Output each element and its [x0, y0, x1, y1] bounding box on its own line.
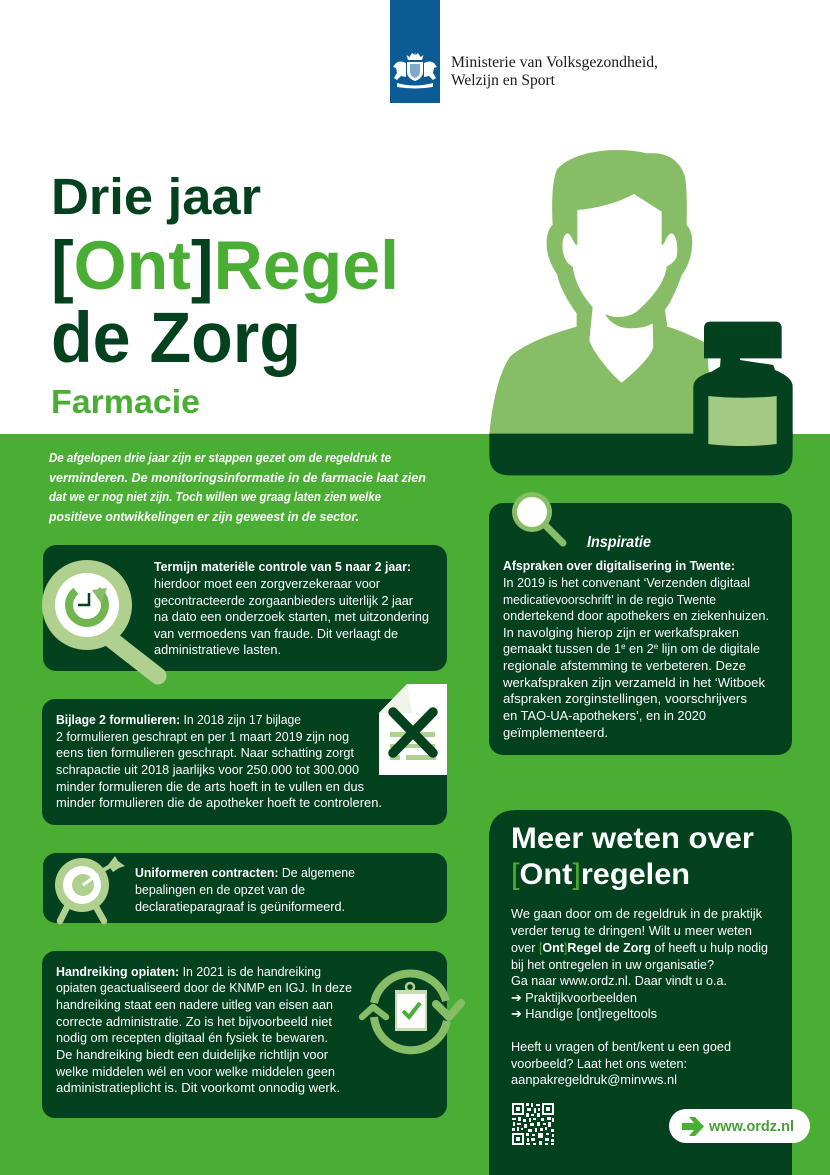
- panel: inspiratie: [489, 492, 792, 755]
- icon: small magnifier: [512, 492, 563, 543]
- text: meer weten: bij het ontregelen in uw organisatie?: [511, 957, 714, 972]
- title: [Ont]Regel: [51, 227, 399, 304]
- icon: arrow: [682, 1117, 704, 1136]
- text: handreiking: handreiking staat een nadere uitleg van eisen aan: [56, 997, 333, 1012]
- intro paragraph: verminderen. De monitoringsinformatie in de farmacie laat zien: [49, 470, 426, 485]
- logo ribbon with coat of arms: [390, 0, 440, 103]
- text: meer weten: over [Ont]Regel de Zorg of heeft u hulp nodig: [511, 940, 768, 955]
- ministry name: Welzijn en Sport: [451, 72, 556, 89]
- panel: handreiking opiaten: [42, 951, 461, 1118]
- text: bijlage: [56, 712, 382, 810]
- text: inspiratie: werkafspraken zijn verzameld in het ‘Witboek: [502, 675, 766, 690]
- text: inspiratie: e: [621, 642, 626, 651]
- heading: meer weten over ontregelen: [Ont]regelen: [511, 858, 690, 891]
- heading: meer weten over ontregelen: Meer weten over: [511, 822, 754, 855]
- icon: crossed-out form: [379, 684, 447, 775]
- dark base band: [489, 434, 793, 475]
- heading: meer weten over ontregelen: [511, 822, 754, 891]
- text: meer weten: voorbeeld? Laat het ons weten:: [511, 1056, 687, 1071]
- text: termijn: hierdoor moet een zorgverzekeraar voor: [154, 576, 381, 591]
- text: inspiratie: geïmplementeerd.: [503, 725, 608, 740]
- panel: termijn materiele controle: [42, 545, 447, 676]
- text: meer weten: ➔ Handige [ont]regeltools: [511, 1006, 657, 1021]
- text: inspiratie: medicatievoorschrift’ in de regio Twente: [503, 592, 716, 607]
- text: inspiratie: In navolging hierop zijn er werkafspraken: [503, 625, 739, 640]
- text: meer weten: verder terug te dringen! Wilt u meer weten: [511, 923, 752, 938]
- text: bijlage: Bijlage 2 formulieren: In 2018 zijn 17 bijlage: [56, 712, 301, 727]
- text: meer weten: ➔ Praktijkvoorbeelden: [511, 990, 637, 1005]
- bottle label: [708, 396, 777, 446]
- panel: uniformeren contracten: [43, 853, 447, 923]
- text: handreiking: Handreiking opiaten: In 2021 is de handreiking: [56, 964, 321, 979]
- intro paragraph: De afgelopen drie jaar zijn er stappen gezet om de regeldruk te: [49, 450, 391, 465]
- text: handreiking: administratieplicht is. Dit voorkomt onnodig werk.: [56, 1080, 340, 1095]
- ministry name: [451, 54, 658, 89]
- header: ministry logo: [390, 0, 658, 103]
- text: termijn: na dato een onderzoek starten, met uitzondering: [154, 609, 429, 624]
- text: termijn: gecontracteerde zorgaanbieders uiterlijk 2 jaar: [154, 593, 414, 608]
- text: bijlage: 2 formulieren geschrapt en per 1 maart 2019 zijn nog: [56, 729, 349, 744]
- text: termijn: [154, 559, 429, 657]
- icon: magnifier with clock: [42, 560, 158, 676]
- QR code: [512, 1103, 554, 1145]
- text: bijlage: eens tien formulieren geschrapt. Naar schatting zorgt: [56, 745, 354, 760]
- text: inspiratie: en TAO-UA-apothekers’, en in 2020: [503, 708, 706, 723]
- text: inspiratie: afspraken zorginstellingen, voorschrijvers: [503, 691, 747, 706]
- icon: target with arrow: [55, 856, 125, 921]
- text: uniformeren: declaratieparagraaf is geüniformeerd.: [135, 899, 345, 914]
- text: handreiking: welke middelen wél en voor welke middelen geen: [55, 1064, 335, 1079]
- text: handreiking: nodig om recepten digitaal én fysiek te bewaren.: [56, 1030, 328, 1045]
- text: uniformeren: Uniformeren contracten: De algemene: [135, 865, 355, 880]
- text: handreiking: [55, 964, 352, 1095]
- text: inspiratie: ondertekend door apothekers en ziekenhuizen.: [503, 608, 769, 623]
- text: meer weten: We gaan door om de regeldruk in de praktijk: [511, 906, 763, 921]
- panel: bijlage 2 formulieren: [42, 684, 447, 825]
- text: meer weten: Heeft u vragen of bent/kent u een goed: [511, 1039, 731, 1054]
- text: termijn: Termijn materiële controle van 5 naar 2 jaar:: [154, 559, 411, 574]
- icon: pharmacist with medicine bottle: [489, 150, 793, 475]
- intro paragraph: positieve ontwikkelingen er zijn geweest in de sector.: [48, 509, 359, 524]
- text: bijlage: minder formulieren die de apotheker hoeft te controleren.: [56, 795, 382, 810]
- intro paragraph: dat we er nog niet zijn. Toch willen we graag laten zien welke: [49, 489, 381, 504]
- text: meer weten: [511, 906, 768, 1087]
- panel: meer weten: [489, 810, 810, 1175]
- text: meer weten: Ga naar www.ordz.nl. Daar vindt u o.a.: [511, 973, 727, 988]
- text: handreiking: opiaten geactualiseerd door de KNMP en IGJ. In deze: [56, 980, 352, 995]
- ministry name: Ministerie van Volksgezondheid,: [451, 54, 658, 71]
- title: de Zorg: [51, 299, 301, 378]
- text: termijn: van vermoedens van fraude. Dit verlaagt de: [154, 626, 398, 641]
- text: inspiratie: gemaakt tussen de 1: [503, 641, 622, 656]
- title: Drie jaar: [51, 168, 261, 225]
- title: [51, 168, 399, 420]
- intro paragraph: [48, 450, 426, 524]
- text: inspiratie: [502, 558, 769, 740]
- website pill: www.ordz.nl: [708, 1118, 794, 1135]
- text: handreiking: De handreiking biedt een duidelijke richtlijn voor: [56, 1047, 329, 1062]
- text: uniformeren: [135, 865, 355, 914]
- text: inspiratie: e: [654, 642, 659, 651]
- text: termijn: administratieve lasten.: [154, 642, 281, 657]
- text: meer weten: aanpakregeldruk@minvws.nl: [511, 1072, 677, 1087]
- text: inspiratie: regionale afstemming te verbeteren. Deze: [503, 658, 746, 673]
- title: Farmacie: [51, 383, 200, 420]
- bottle: [693, 322, 793, 437]
- text: inspiratie: en 2: [625, 641, 654, 656]
- text: inspiratie: lijn om de digitale: [658, 641, 760, 656]
- text: inspiratie: In 2019 is het convenant ‘Verzenden digitaal: [503, 575, 750, 590]
- text: inspiratie: Afspraken over digitalisering in Twente:: [503, 558, 735, 573]
- website pill: [669, 1109, 810, 1143]
- person silhouette: [489, 150, 713, 434]
- icon: clipboard with cycle arrows: [362, 973, 461, 1050]
- text: uniformeren: bepalingen en de opzet van de: [135, 882, 305, 897]
- inspiratie heading: Inspiratie: [587, 534, 651, 551]
- text: bijlage: schrapactie uit 2018 jaarlijks voor 250.000 tot 300.000: [56, 762, 359, 777]
- text: handreiking: correcte administratie. Zo is het bijvoorbeeld niet: [56, 1014, 332, 1029]
- text: bijlage: minder formulieren die de arts hoeft in te vullen en dus: [56, 779, 364, 794]
